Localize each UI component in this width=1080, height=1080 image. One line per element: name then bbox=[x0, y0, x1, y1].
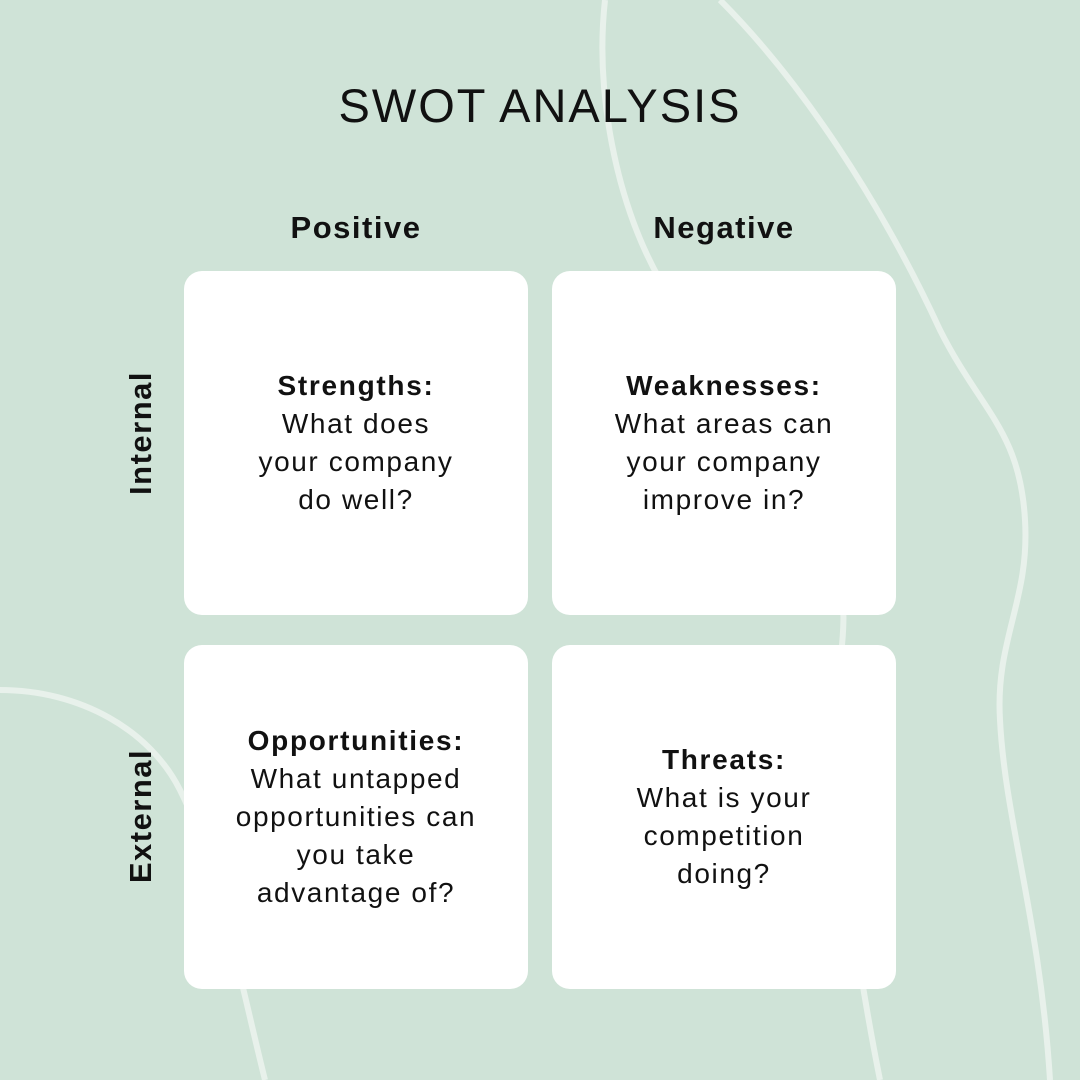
card: weaknesses bbox=[552, 271, 896, 615]
card: weaknesses: your company bbox=[626, 446, 822, 477]
card: opportunities: you take bbox=[297, 839, 415, 870]
card: opportunities bbox=[184, 645, 528, 989]
card: strengths: your company bbox=[258, 446, 454, 477]
card: threats: doing? bbox=[677, 858, 771, 889]
header: positive: Positive bbox=[291, 210, 421, 245]
card: threats: Threats: bbox=[662, 744, 786, 775]
card: strengths: What does bbox=[282, 408, 430, 439]
card: opportunities: opportunities can bbox=[236, 801, 476, 832]
card: opportunities: Opportunities: bbox=[248, 725, 464, 756]
card: weaknesses: improve in? bbox=[643, 484, 805, 515]
card: strengths bbox=[184, 271, 528, 615]
card: strengths: do well? bbox=[298, 484, 414, 515]
card: weaknesses: What areas can bbox=[615, 408, 833, 439]
side label: external: External bbox=[123, 749, 158, 883]
side label: internal: Internal bbox=[123, 371, 158, 495]
card: opportunities: advantage of? bbox=[257, 877, 455, 908]
card: weaknesses: Weaknesses: bbox=[626, 370, 822, 401]
card: opportunities: What untapped bbox=[251, 763, 461, 794]
card: threats: competition bbox=[644, 820, 804, 851]
header: negative: Negative bbox=[653, 210, 795, 245]
card: threats: What is your bbox=[637, 782, 811, 813]
card: strengths: Strengths: bbox=[278, 370, 434, 401]
card: threats bbox=[552, 645, 896, 989]
title: SWOT ANALYSIS bbox=[338, 79, 742, 132]
